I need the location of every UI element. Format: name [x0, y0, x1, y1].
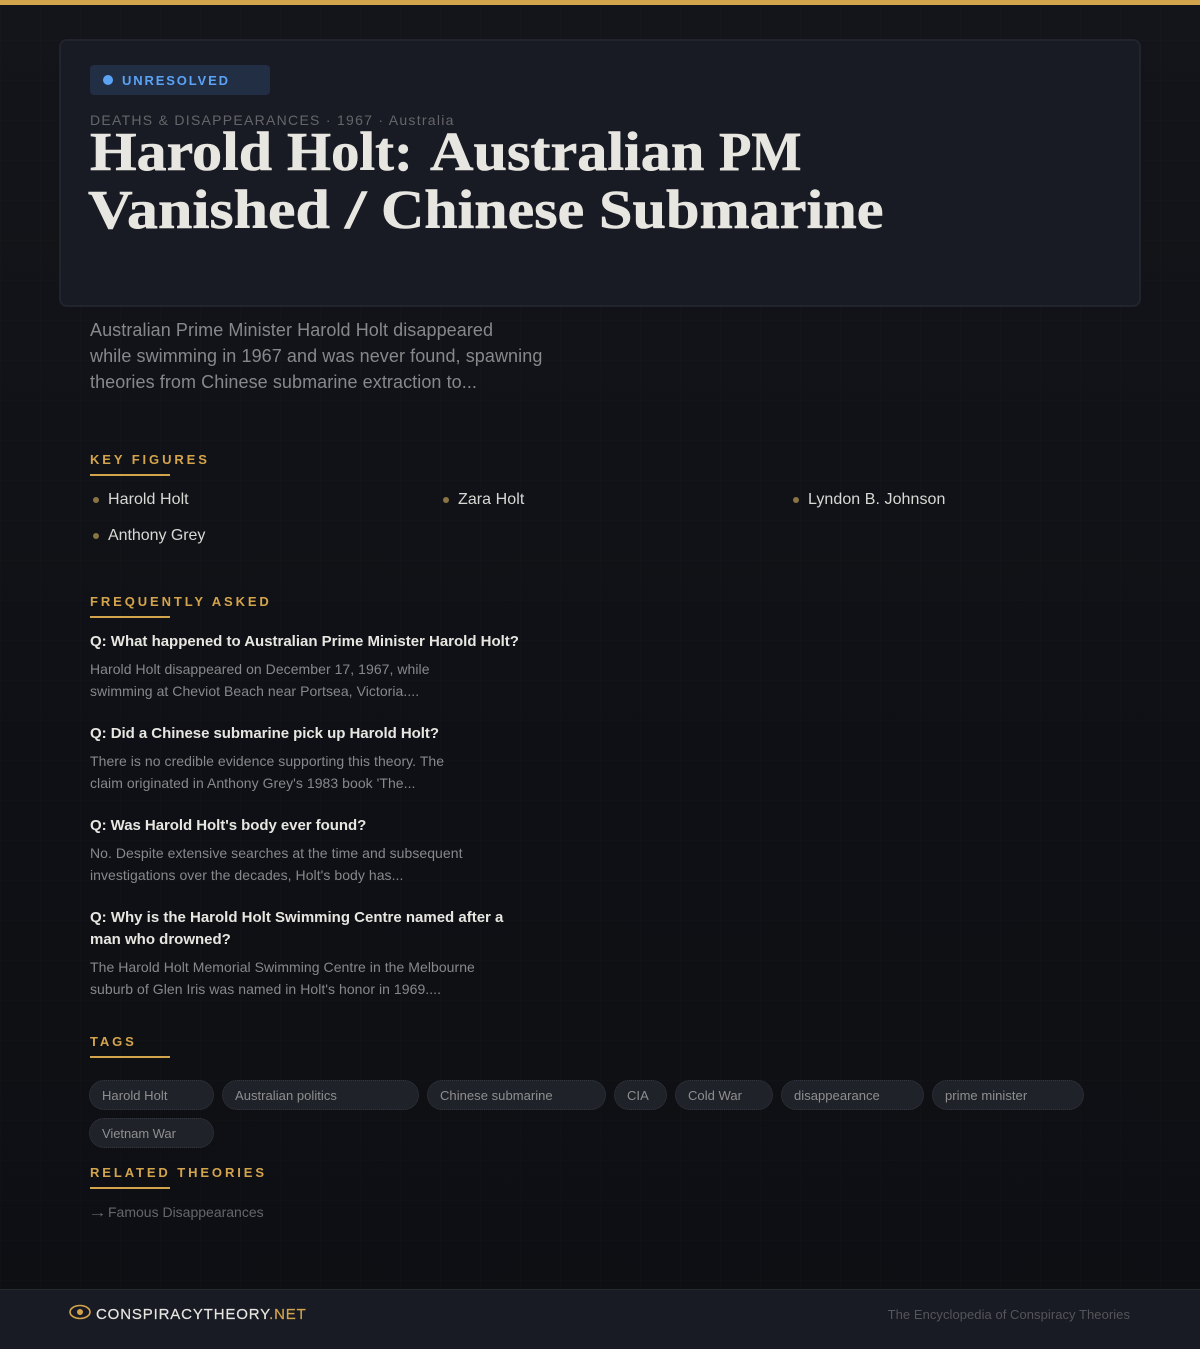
summary text: while swimming in 1967 and was never found, spawning	[90, 346, 542, 366]
tag: Australian politics: Australian politics	[235, 1088, 337, 1103]
title: Holt:	[287, 121, 413, 182]
tag: Australian politics	[222, 1080, 419, 1110]
figure: Zara Holt: Zara Holt	[458, 491, 524, 508]
tag: CIA	[614, 1080, 667, 1110]
title: Australian	[430, 121, 704, 182]
title: PM	[719, 121, 802, 182]
status label: UNRESOLVED	[122, 73, 230, 88]
top accent bar	[0, 0, 1200, 5]
heading: tags: TAGS	[90, 1034, 137, 1049]
question 2: Q: Did a Chinese submarine pick up Harold Holt?	[90, 725, 439, 742]
tag: CIA: CIA	[627, 1088, 649, 1103]
question 4: Q: Why is the Harold Holt Swimming Centre named after a	[90, 909, 503, 926]
answer 1	[90, 661, 430, 699]
heading: related theories: RELATED THEORIES	[90, 1165, 267, 1180]
tag: Harold Holt: Harold Holt	[102, 1088, 167, 1103]
tag: Chinese submarine	[427, 1080, 606, 1110]
tag: prime minister	[932, 1080, 1084, 1110]
question 3: Q: Was Harold Holt's body ever found?	[90, 817, 366, 834]
tag: Cold War	[675, 1080, 773, 1110]
title: /	[345, 179, 366, 240]
icon: eye logo	[69, 1304, 91, 1320]
summary text: theories from Chinese submarine extraction to...	[90, 372, 477, 392]
answer 3	[90, 845, 463, 883]
answer 2: There is no credible evidence supporting this theory. The	[90, 753, 444, 769]
tag: Vietnam War: Vietnam War	[102, 1126, 176, 1141]
figure: Lyndon B. Johnson: Lyndon B. Johnson	[808, 491, 945, 508]
tag: Vietnam War	[89, 1118, 214, 1148]
answer 2	[90, 753, 444, 791]
answer 3: investigations over the decades, Holt's body has...	[90, 867, 403, 883]
answer 1: Harold Holt disappeared on December 17, 1967, while	[90, 661, 430, 677]
answer 1: swimming at Cheviot Beach near Portsea, Victoria....	[90, 683, 419, 699]
tag: Harold Holt	[89, 1080, 214, 1110]
figure: Harold Holt: Harold Holt	[108, 491, 189, 508]
answer 2: claim originated in Anthony Grey's 1983 book 'The...	[90, 775, 415, 791]
site name: CONSPIRACYTHEORY.NET	[96, 1306, 307, 1323]
summary text	[90, 320, 542, 392]
question 4	[90, 909, 504, 948]
related theory link: Famous Disappearances	[108, 1204, 264, 1220]
heading: frequently asked: FREQUENTLY ASKED	[90, 594, 272, 609]
answer 4: suburb of Glen Iris was named in Holt's honor in 1969....	[90, 981, 441, 997]
title: Chinese	[381, 179, 584, 240]
heading: key figures: KEY FIGURES	[90, 452, 210, 467]
footer bar	[0, 1289, 1200, 1349]
answer 4: The Harold Holt Memorial Swimming Centre in the Melbourne	[90, 959, 475, 975]
related theory link: →	[88, 1204, 107, 1220]
tag: Chinese submarine: Chinese submarine	[440, 1088, 553, 1103]
tagline: The Encyclopedia of Conspiracy Theories	[888, 1307, 1130, 1322]
tag: disappearance: disappearance	[794, 1088, 880, 1103]
answer 4	[90, 959, 475, 997]
question 4: man who drowned?	[90, 931, 231, 948]
tag: disappearance	[781, 1080, 924, 1110]
question 1: Q: What happened to Australian Prime Minister Harold Holt?	[90, 633, 519, 650]
title: Submarine	[599, 179, 883, 240]
tag: prime minister: prime minister	[945, 1088, 1027, 1103]
title: Vanished	[88, 179, 330, 240]
summary text: Australian Prime Minister Harold Holt disappeared	[90, 320, 493, 340]
panel: hero header	[59, 39, 1141, 307]
status dot	[103, 75, 113, 85]
title	[88, 121, 883, 240]
status badge: unresolved	[90, 65, 270, 95]
tag: Cold War: Cold War	[688, 1088, 742, 1103]
figure: Anthony Grey: Anthony Grey	[108, 527, 205, 544]
title: Harold	[90, 121, 272, 182]
answer 3: No. Despite extensive searches at the time and subsequent	[90, 845, 463, 861]
category and date line: DEATHS & DISAPPEARANCES · 1967 · Australia	[90, 112, 455, 128]
